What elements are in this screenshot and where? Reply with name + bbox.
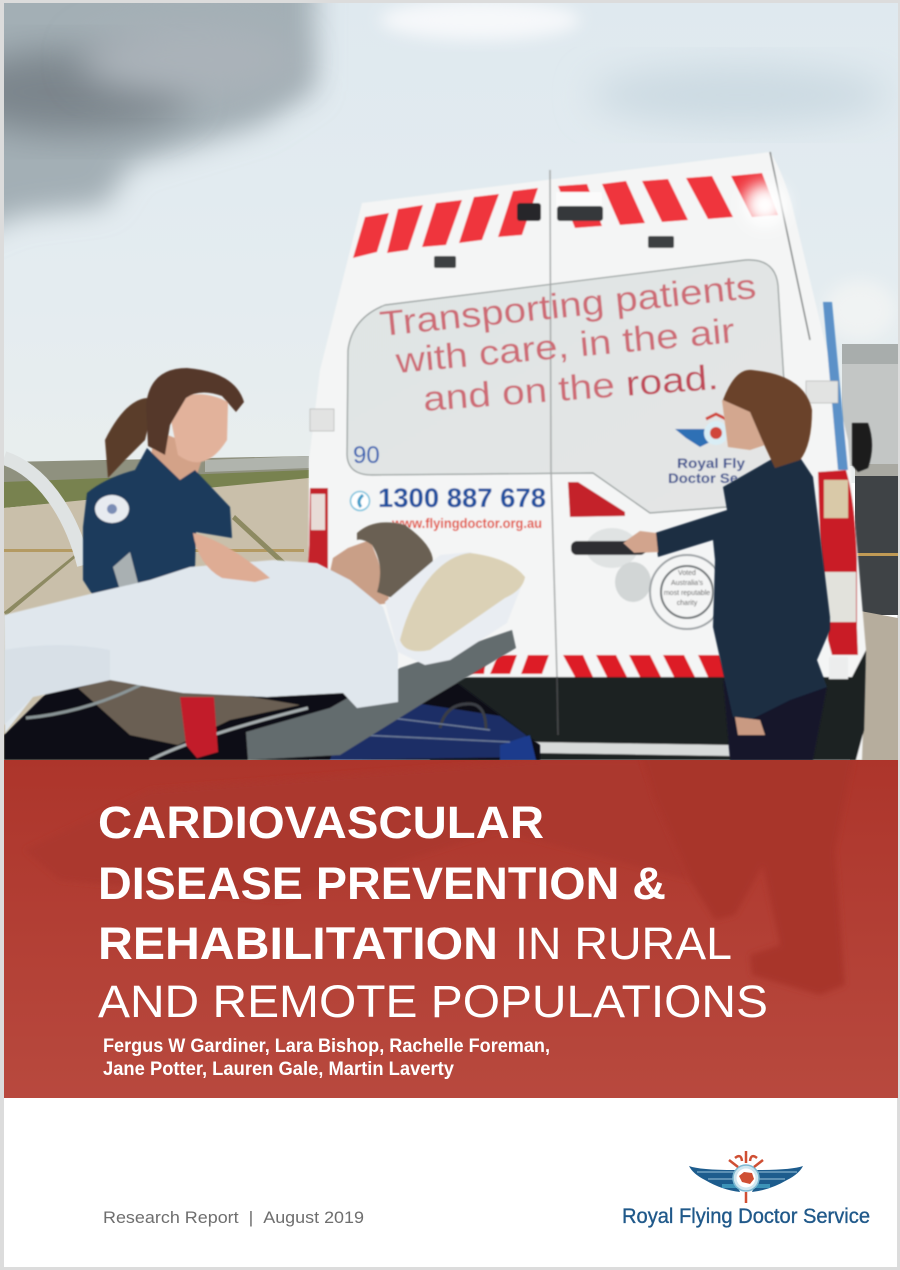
paramedic hand	[193, 533, 270, 582]
lower hazard stripes	[460, 655, 727, 677]
charity seal: charity	[677, 600, 698, 607]
title: CARDIOVASCULAR	[98, 797, 544, 848]
van number and contact: www.flyingdoctor.org.au	[391, 515, 542, 531]
title: REHABILITATION	[98, 918, 498, 969]
pillow	[385, 552, 525, 665]
chrome step	[527, 742, 732, 756]
face	[722, 400, 770, 450]
equipment tray	[330, 700, 536, 760]
authors: Fergus W Gardiner, Lara Bishop, Rachelle Foreman,	[103, 1036, 550, 1057]
title: AND REMOTE POPULATIONS	[98, 976, 768, 1027]
window slogan: with care, in the air	[393, 311, 737, 381]
brake light and sensors	[434, 192, 674, 268]
neck	[150, 434, 202, 481]
face	[168, 394, 228, 462]
ponytail	[105, 398, 150, 478]
photo: ambulance and crew	[0, 0, 898, 760]
door handle	[571, 528, 651, 602]
window slogan	[378, 277, 756, 412]
door hinges	[310, 409, 334, 431]
reflected figure	[640, 750, 855, 995]
hand on door	[623, 531, 658, 553]
patient head	[330, 522, 433, 605]
roof hazard stripes	[353, 173, 778, 258]
logo caduceus	[729, 1151, 763, 1203]
stretcher frame	[26, 630, 516, 760]
report date: Research Report | August 2019	[103, 1208, 364, 1227]
title: DISEASE PREVENTION &	[98, 858, 666, 909]
jacket	[655, 447, 830, 720]
red title band	[4, 750, 898, 1098]
van body	[308, 152, 866, 760]
hair	[146, 368, 244, 455]
van number and contact: 1300 887 678	[378, 483, 546, 513]
charity seal: most reputable	[664, 590, 710, 597]
van number and contact: 90	[353, 442, 380, 469]
van number and contact	[350, 442, 546, 531]
curved rail	[4, 458, 84, 565]
red indicator lamp	[568, 482, 625, 517]
logo wordmark: Royal Flying Doctor Service	[622, 1205, 870, 1228]
logo roundel	[733, 1165, 759, 1191]
logo: Royal Flying Doctor Service	[622, 1151, 870, 1228]
number plate	[828, 676, 850, 680]
charity seal	[650, 555, 724, 629]
shoulder badge	[95, 495, 129, 523]
authors	[103, 1036, 550, 1080]
title	[98, 797, 768, 1027]
uniform	[83, 448, 232, 594]
window slogan: Transporting patients	[378, 267, 758, 344]
rear window	[347, 260, 787, 513]
charity seal: Voted	[678, 570, 696, 577]
crew member	[623, 370, 830, 760]
van door logo: Royal Fly	[677, 455, 745, 471]
folded brown cloth	[78, 675, 300, 745]
trousers	[723, 680, 827, 760]
ambulance van	[308, 152, 872, 760]
window slogan: and on the road.	[422, 358, 720, 419]
building	[842, 344, 898, 466]
wing mirror	[852, 423, 872, 472]
logo wings	[689, 1166, 803, 1192]
blanket fold shadow	[4, 645, 110, 725]
paramedic	[83, 368, 244, 594]
sleeve band	[113, 552, 138, 590]
door seam	[550, 170, 557, 677]
title: IN RURAL	[515, 918, 732, 969]
right tail light	[818, 470, 858, 655]
van door logo	[668, 414, 745, 486]
left tail light	[308, 488, 328, 570]
airfield ground	[4, 456, 898, 760]
authors: Jane Potter, Lauren Gale, Martin Laverty	[103, 1059, 454, 1080]
dark undercarriage	[4, 684, 541, 760]
rear bumper	[430, 650, 866, 760]
van door logo: Doctor Se	[668, 470, 738, 486]
blanket	[4, 560, 398, 733]
hair	[723, 370, 812, 468]
sky with clouds	[0, 0, 898, 483]
reflected stretcher	[25, 760, 690, 900]
charity seal: Australia's	[671, 580, 704, 587]
red safety strap	[180, 697, 218, 758]
